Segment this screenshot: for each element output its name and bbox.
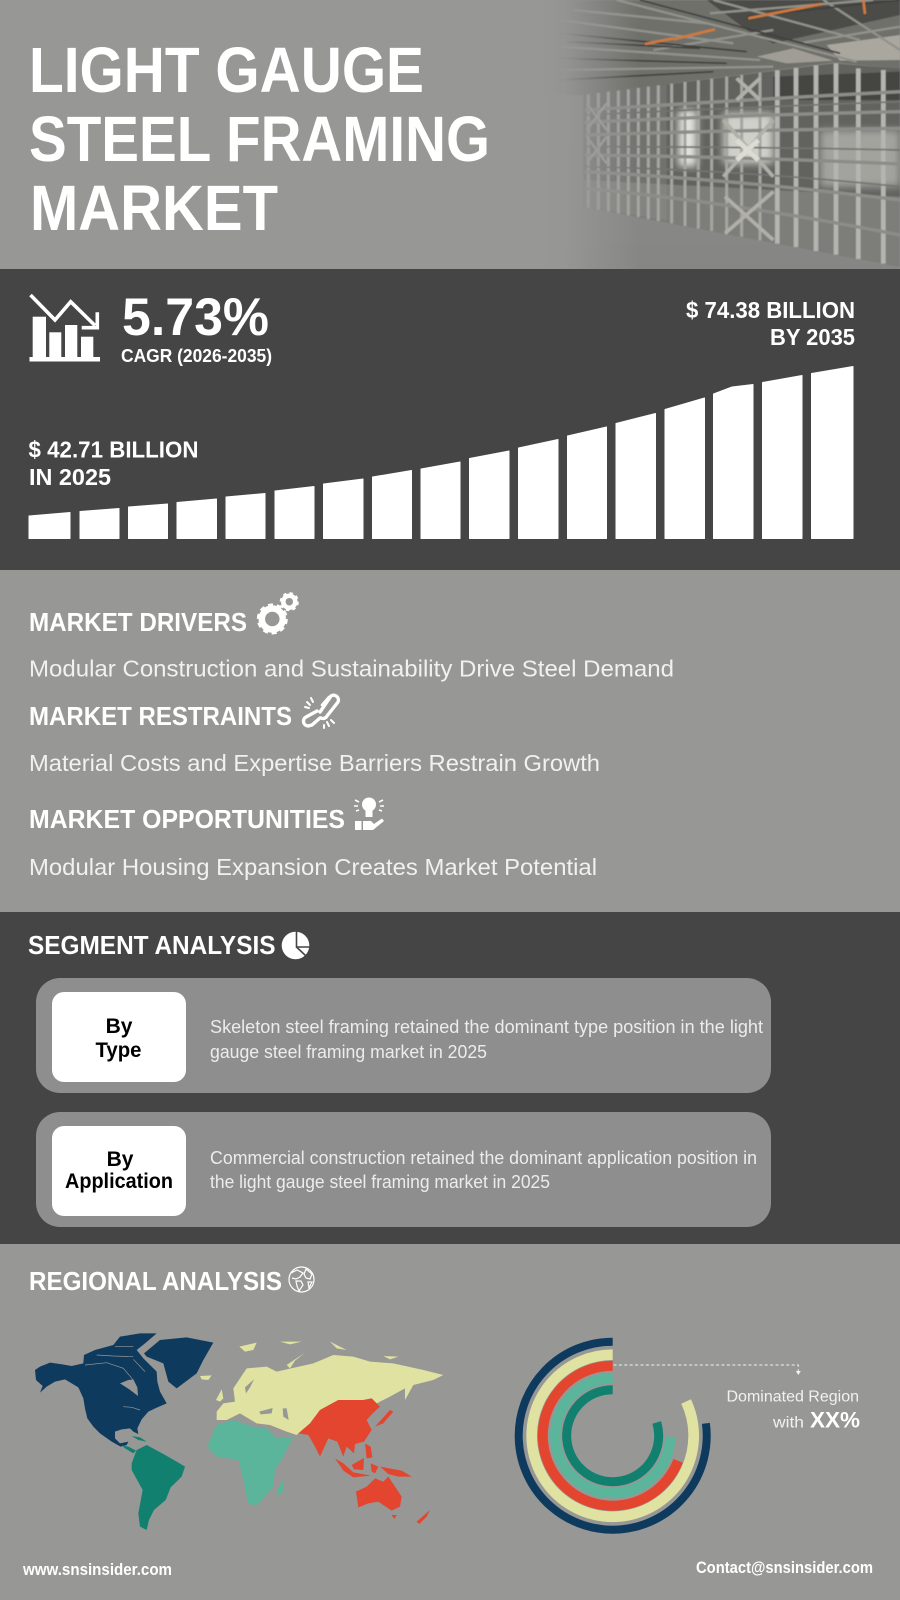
photo: steel framing wall xyxy=(540,0,900,270)
panel: header xyxy=(0,0,900,270)
text: by type description: gauge steel framing market in 2025 xyxy=(210,1041,487,1062)
text: by application description: the light gauge steel framing market in 2025 xyxy=(210,1171,550,1192)
sea cutouts xyxy=(245,1379,289,1420)
icon: pie chart xyxy=(282,931,310,959)
label box: by type: Type xyxy=(96,1039,142,1062)
dotted callout arrow xyxy=(614,1365,801,1375)
card: by application xyxy=(36,1112,771,1227)
footer: contact: Contact@snsinsider.com xyxy=(696,1558,873,1577)
region: africa xyxy=(208,1420,293,1506)
bar chart xyxy=(29,366,853,538)
callout: dominated region: Dominated Region xyxy=(726,1388,859,1406)
arctic channels xyxy=(85,1347,145,1410)
label box: by type: By xyxy=(106,1015,133,1038)
region: europe and north asia xyxy=(200,1342,443,1435)
text: drivers: Modular Construction and Sustainability Drive Steel Demand xyxy=(29,656,674,682)
icon: broken chain xyxy=(304,695,338,728)
radial bar chart xyxy=(519,1342,707,1530)
callout: dominated region xyxy=(726,1388,860,1432)
label box: by application xyxy=(52,1126,186,1216)
text: by type description: Skeleton steel framing retained the dominant type position in the light xyxy=(210,1016,763,1037)
end value label: $ 74.38 BILLION xyxy=(686,297,855,323)
text: opportunities: Modular Housing Expansion Creates Market Potential xyxy=(29,854,597,880)
footer: website: www.snsinsider.com xyxy=(22,1561,172,1579)
icon: bar chart with trend arrow xyxy=(30,295,100,362)
panel: market dynamics xyxy=(0,570,900,912)
panel: market size and growth xyxy=(0,269,900,570)
heading: market drivers: MARKET DRIVERS xyxy=(29,607,247,637)
text: by application description: Commercial construction retained the dominant application position in xyxy=(210,1147,757,1168)
title: STEEL FRAMING xyxy=(29,103,490,175)
start value label: IN 2025 xyxy=(29,464,111,490)
label box: by application: Application xyxy=(65,1170,173,1193)
label box: by application: By xyxy=(107,1148,134,1171)
callout: dominated region: with xyxy=(772,1414,804,1432)
label box: by type xyxy=(52,992,186,1082)
panel: segment analysis xyxy=(0,912,900,1244)
region: asia pacific xyxy=(298,1398,430,1524)
heading: segment analysis: SEGMENT ANALYSIS xyxy=(28,930,276,960)
cagr value: 5.73% xyxy=(122,288,269,347)
world map xyxy=(35,1333,443,1530)
title: LIGHT GAUGE xyxy=(29,34,424,106)
hudson bay cutout xyxy=(120,1379,138,1396)
text: by type description xyxy=(210,1016,763,1062)
title xyxy=(29,34,490,244)
heading: market opportunities: MARKET OPPORTUNITIES xyxy=(29,804,345,834)
panel: regional analysis xyxy=(0,1244,900,1600)
region: south america xyxy=(122,1436,185,1530)
heading: market restraints: MARKET RESTRAINTS xyxy=(29,701,292,731)
icon: gears xyxy=(258,593,298,633)
start value label: $ 42.71 BILLION xyxy=(28,436,198,462)
icon: globe xyxy=(289,1267,314,1292)
text: by application description xyxy=(210,1147,757,1192)
icon: light bulb in hand xyxy=(354,798,384,830)
heading: regional analysis: REGIONAL ANALYSIS xyxy=(29,1266,282,1296)
region: north america xyxy=(35,1333,213,1447)
card: by type xyxy=(36,978,771,1093)
cagr label: CAGR (2026-2035) xyxy=(121,345,272,366)
callout: dominated region: XX% xyxy=(810,1408,860,1432)
end value label xyxy=(686,297,855,350)
title: MARKET xyxy=(30,172,278,244)
end value label: BY 2035 xyxy=(770,324,855,350)
start value label xyxy=(28,436,198,490)
text: restraints: Material Costs and Expertise Barriers Restrain Growth xyxy=(29,750,600,776)
